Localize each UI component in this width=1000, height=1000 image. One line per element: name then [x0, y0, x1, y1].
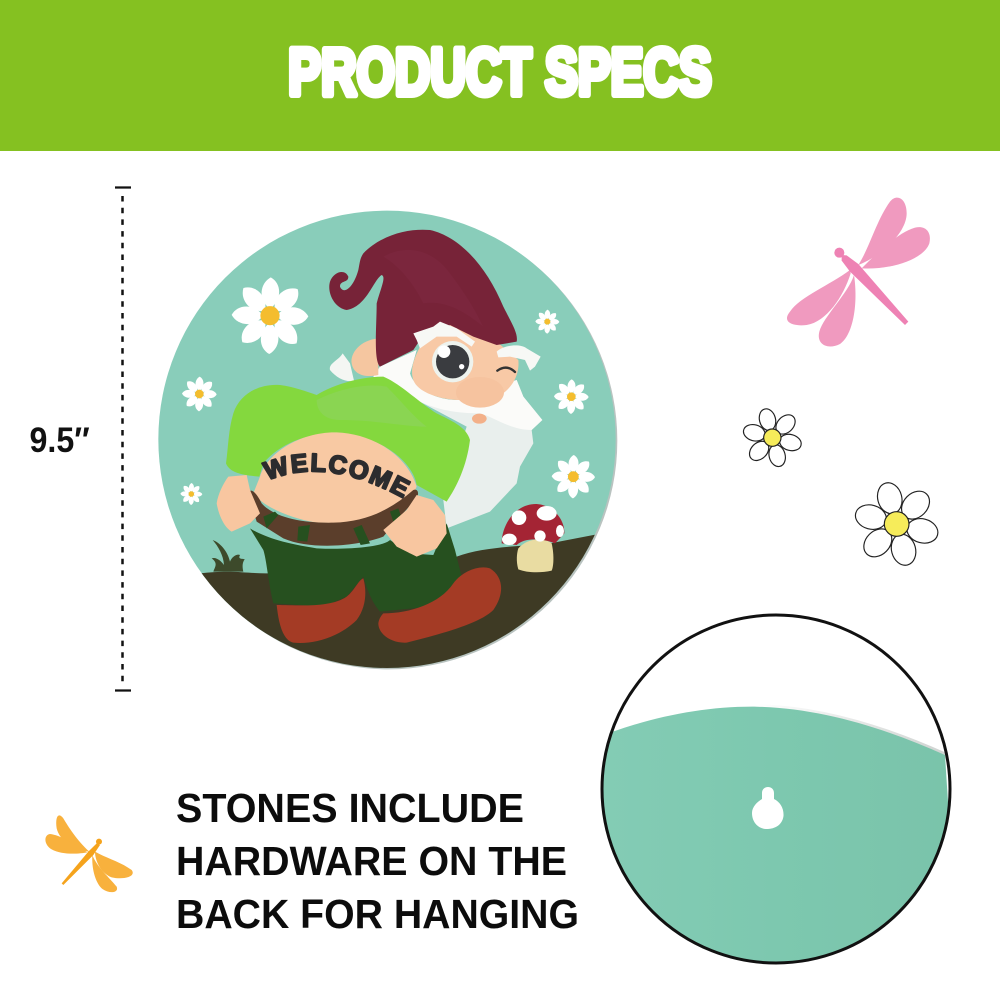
gnome ear — [351, 338, 378, 376]
title: PRODUCT SPECS — [288, 36, 712, 109]
dimension line — [115, 188, 131, 690]
hardware note — [176, 785, 579, 937]
gnome nose — [456, 377, 504, 408]
keyhole — [752, 787, 784, 829]
pink dragonfly — [787, 198, 930, 347]
gnome beard — [373, 350, 542, 528]
grass — [212, 540, 245, 572]
hardware note: STONES INCLUDE — [176, 785, 524, 831]
winking eye — [497, 368, 515, 372]
moustache — [373, 350, 542, 430]
bare bottom — [253, 432, 417, 523]
mushroom — [502, 504, 564, 572]
hair tuft — [330, 353, 354, 381]
dimension label: 9.5″ — [30, 422, 90, 460]
round gnome stone — [158, 210, 618, 670]
orange dragonfly — [45, 815, 133, 892]
belt — [249, 490, 418, 546]
hardware note: BACK FOR HANGING — [176, 891, 579, 937]
outlined daisy small — [742, 407, 803, 468]
outlined daisy large — [853, 480, 941, 568]
header banner — [0, 0, 1000, 151]
stone edge shadow — [789, 707, 945, 755]
ground — [202, 534, 595, 668]
gnome hat — [329, 230, 517, 367]
stone back — [604, 706, 948, 962]
zoom circle: back of stone — [600, 614, 952, 964]
gnome mouth — [472, 414, 487, 424]
green shirt — [226, 377, 470, 502]
white flowers — [180, 277, 595, 505]
hat highlight — [383, 250, 483, 327]
gnome hands — [217, 475, 447, 557]
gnome eye — [432, 341, 473, 382]
gnome trousers — [250, 523, 462, 612]
belt loops — [263, 508, 402, 545]
gnome boots — [277, 567, 501, 643]
shirt highlight — [317, 385, 427, 427]
gnome face — [412, 322, 519, 400]
hardware note: HARDWARE ON THE — [176, 838, 567, 884]
gnome eyebrows — [413, 322, 541, 371]
welcome text: WELCOME — [261, 452, 412, 499]
